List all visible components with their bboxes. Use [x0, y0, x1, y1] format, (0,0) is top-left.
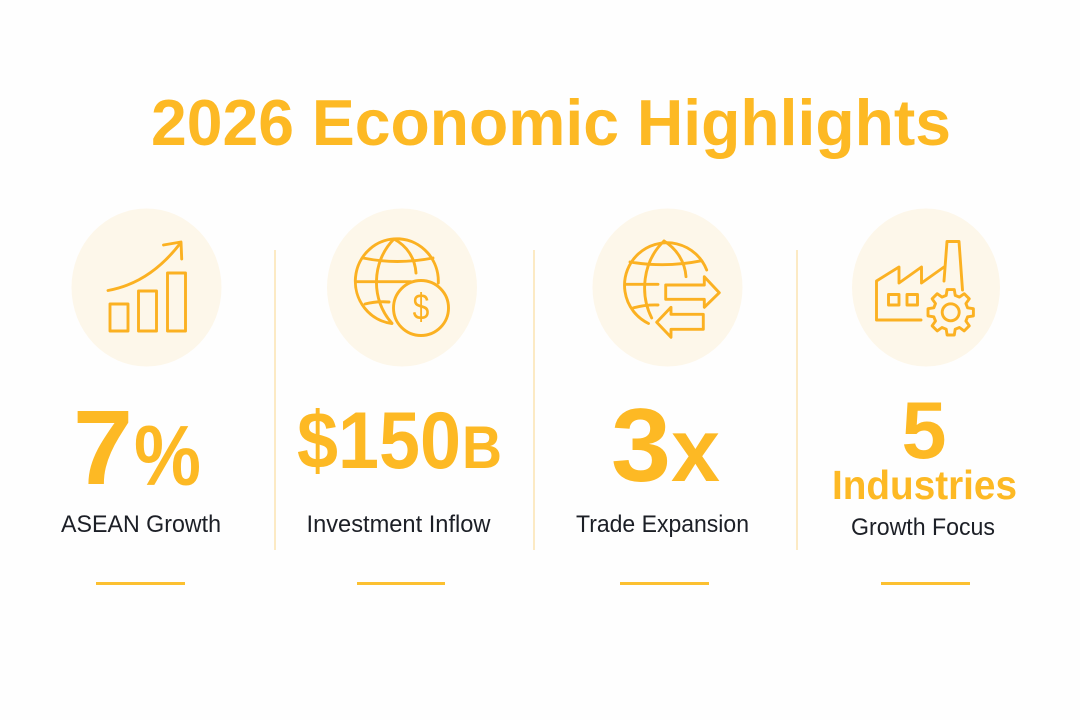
stat: 7% — [73, 389, 201, 507]
panel: ASEAN growth — [61, 208, 222, 585]
panel: investment inflow — [297, 208, 502, 585]
icon: factory with gear — [852, 208, 1000, 366]
icon: globe with trade arrows — [592, 208, 742, 366]
stat: 3x — [611, 388, 720, 504]
accent rule — [96, 582, 185, 585]
label: Trade Expansion: Trade Expansion — [576, 511, 749, 538]
stat: $150B: $150 — [297, 396, 461, 486]
accent rule — [881, 582, 970, 585]
panel: growth focus — [832, 208, 1017, 585]
label: Investment Inflow: Investment Inflow — [306, 511, 491, 538]
stat: 3x: x — [671, 401, 720, 501]
icon: globe with dollar coin — [327, 208, 477, 366]
stat: 7%: % — [134, 409, 201, 504]
label: ASEAN Growth: ASEAN Growth — [61, 511, 221, 538]
stat: 7%: 7 — [73, 389, 133, 507]
label: Growth Focus: Growth Focus — [851, 514, 995, 541]
title: 2026 Economic Highlights — [151, 86, 951, 159]
icon: growth chart — [72, 208, 222, 366]
dollar sign: $ — [413, 286, 429, 328]
panel: trade expansion — [576, 208, 749, 585]
stat: 5 Industries: 5 — [901, 386, 947, 476]
stat: 5 Industries: Industries — [832, 462, 1017, 508]
accent rule — [620, 582, 709, 585]
stat: 3x: 3 — [611, 388, 671, 504]
stat: $150B: B — [462, 414, 502, 481]
stat: 5 Industries — [832, 386, 1017, 508]
accent rule — [357, 582, 445, 585]
